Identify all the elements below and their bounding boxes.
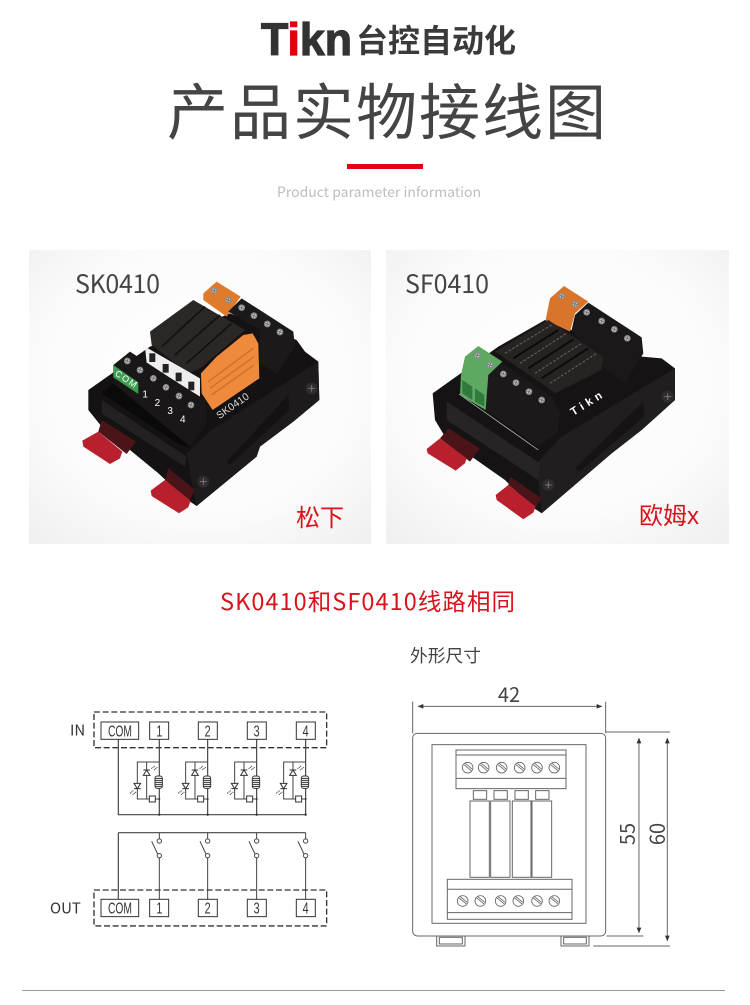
chart: wiring diagram — [50, 712, 327, 926]
photo: SF0410 relay module: Tikn — [569, 390, 605, 419]
label: SK0410: SK0410 — [75, 265, 160, 301]
IN terminal row: IN — [70, 719, 85, 740]
photo: SK0410 relay module: 1 — [142, 389, 148, 400]
OUT terminal row: 2 — [205, 901, 211, 918]
red accent bar — [347, 164, 423, 169]
panel: SK0410 photo — [29, 250, 371, 544]
OUT terminal row: 1 — [156, 901, 162, 918]
IN terminal row: 3 — [254, 723, 260, 740]
dimension values: 60 — [641, 823, 670, 845]
photo: SK0410 relay module — [82, 282, 319, 513]
photo: SK0410 relay module: 4 — [180, 414, 186, 425]
OUT terminal row: 3 — [254, 901, 260, 918]
dimension values — [498, 679, 670, 845]
logo: Tikn — [261, 14, 352, 65]
photo: SK0410 relay module: SK0410 — [215, 391, 252, 422]
chart: outline dimensions — [413, 679, 670, 946]
IN terminal row: COM — [108, 723, 132, 740]
dimension values: 42 — [498, 679, 520, 708]
dimension values: 55 — [611, 823, 640, 845]
label: SF0410: SF0410 — [405, 265, 489, 301]
photo: SK0410 relay module: 2 — [155, 398, 161, 409]
relays — [470, 791, 552, 877]
logo: 台控自动化 — [356, 23, 516, 59]
OUT terminal row — [50, 890, 327, 926]
subtitle: Product parameter information — [277, 182, 481, 202]
OUT terminal row: COM — [108, 901, 132, 918]
label: 欧姆x: 欧姆x — [639, 503, 699, 530]
logo — [261, 14, 516, 65]
OUT terminal row: 4 — [303, 901, 309, 918]
title: 产品实物接线图 — [167, 79, 606, 147]
top terminal block — [456, 750, 566, 789]
IN terminal row: 2 — [205, 723, 211, 740]
bottom terminal block — [447, 879, 572, 919]
photo: SF0410 relay module — [427, 286, 675, 519]
heading: dimensions: 外形尺寸 — [410, 646, 481, 666]
photo: SK0410 relay module: COM — [113, 368, 139, 390]
IN terminal row: 4 — [303, 723, 309, 740]
IN terminal row — [70, 712, 327, 815]
relay coil circuits — [130, 762, 309, 816]
OUT terminal row: OUT — [50, 897, 81, 918]
panel: SF0410 photo — [386, 250, 729, 544]
photo: SK0410 relay module: 3 — [167, 406, 173, 417]
relay contacts — [118, 833, 308, 899]
dimension lines — [413, 702, 670, 946]
label: 松下: 松下 — [296, 505, 344, 532]
IN terminal row: 1 — [156, 723, 162, 740]
caption: SK0410和SF0410线路相同 — [220, 583, 515, 617]
